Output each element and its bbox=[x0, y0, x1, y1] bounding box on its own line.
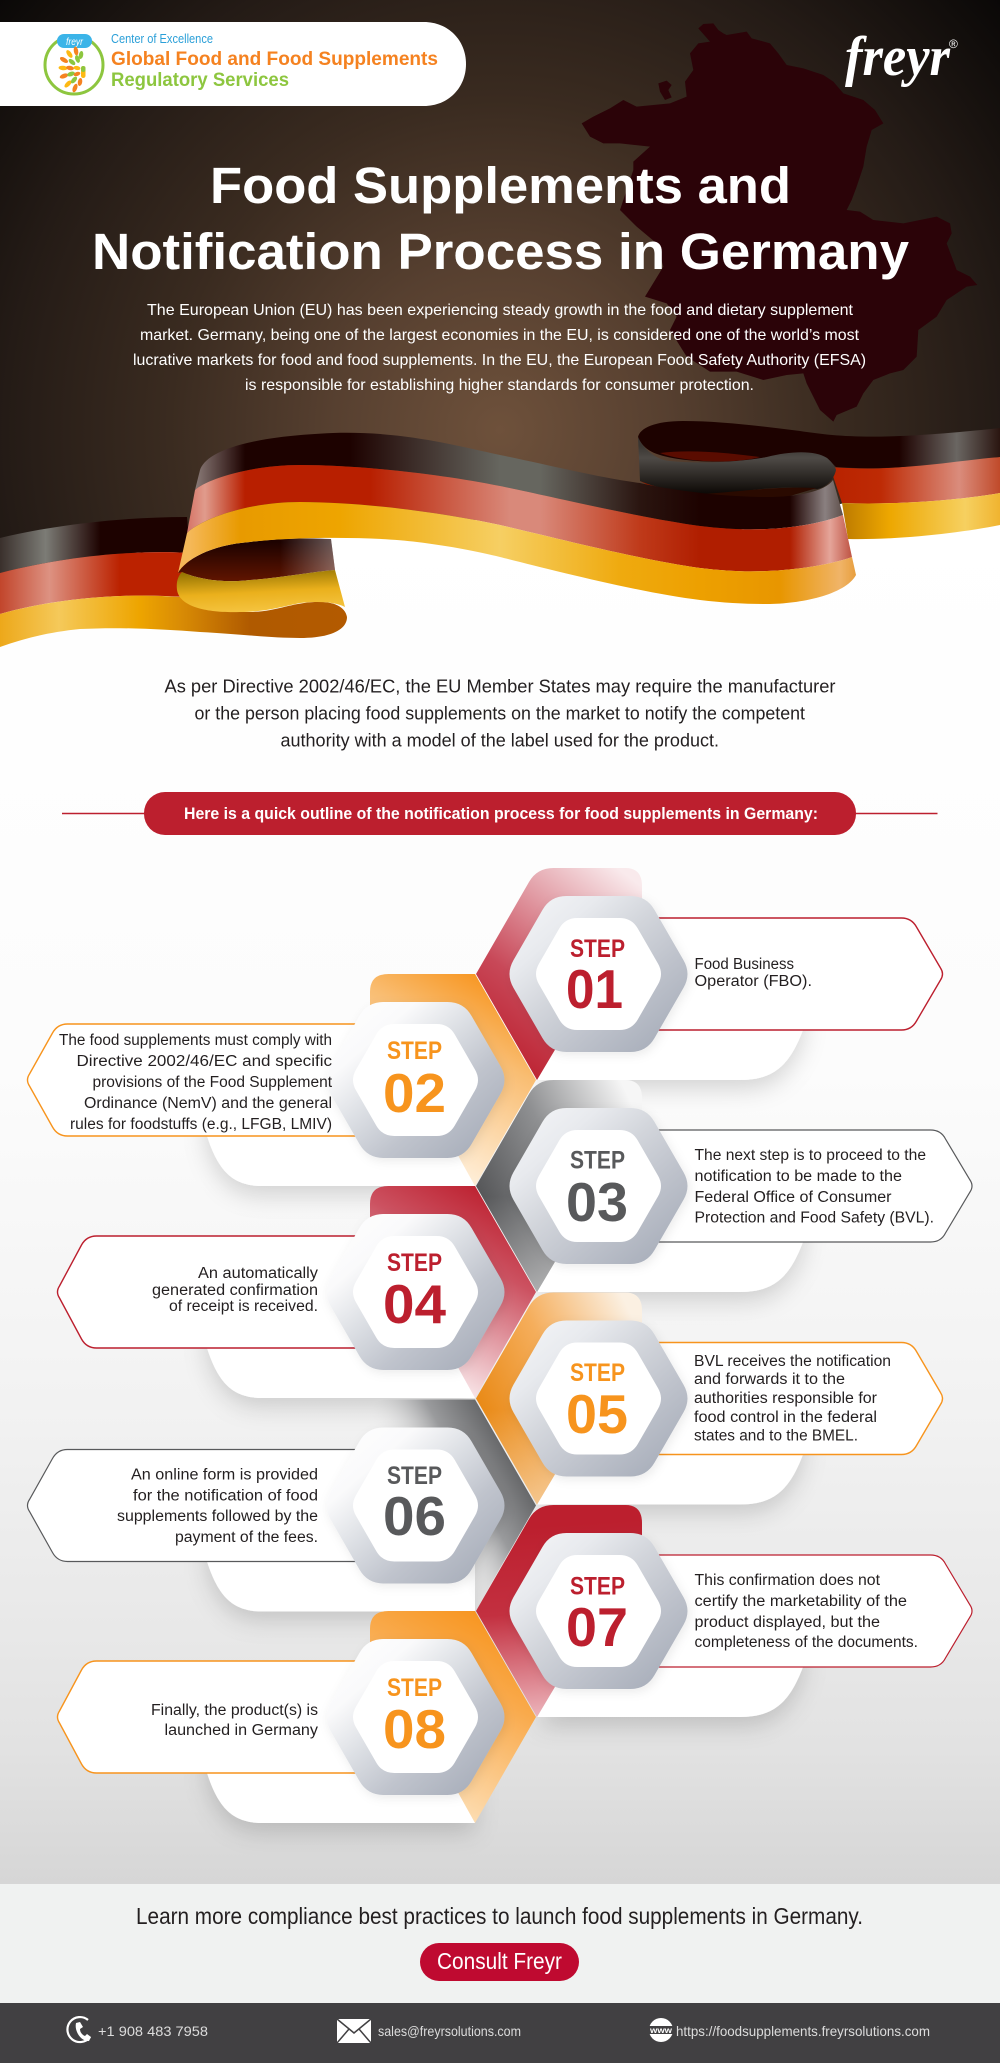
step 06 description: An online form is provided bbox=[131, 1466, 318, 1484]
step 08 description: Finally, the product(s) is bbox=[151, 1702, 318, 1719]
panel: footer contacts bbox=[0, 2003, 1000, 2063]
icon: freyr logo: freyr bbox=[845, 26, 951, 88]
step 03 description: Federal Office of Consumer bbox=[694, 1189, 892, 1206]
step 07 description: completeness of the documents. bbox=[694, 1634, 918, 1651]
text: call to action line: Learn more compliance best practices to launch food supplements in Germany. bbox=[136, 1903, 863, 1929]
step 02 number: 02 bbox=[383, 1062, 446, 1124]
text: introduction paragraph: market. Germany, being one of the largest economies in the EU, is considered one of the world’s most bbox=[140, 327, 860, 344]
step 04 description: of receipt is received. bbox=[169, 1298, 318, 1315]
step 02 label: STEP bbox=[387, 1037, 442, 1065]
step 07 description: certify the marketability of the bbox=[694, 1593, 907, 1610]
ribbon loop bbox=[638, 421, 1000, 502]
panel: step 07 bbox=[476, 1505, 972, 1717]
ribbon main band bbox=[178, 433, 856, 604]
icon: globe: www bbox=[649, 2026, 673, 2035]
step 04 number: 04 bbox=[383, 1273, 446, 1335]
panel: dark header background bbox=[0, 0, 1000, 600]
ribbon fold bbox=[177, 538, 345, 612]
step 02 description: provisions of the Food Supplement bbox=[92, 1074, 333, 1091]
panel: call to action bbox=[0, 1884, 1000, 2003]
step 04 description bbox=[152, 1265, 318, 1315]
heading banner: notification outline: Here is a quick outline of the notification process for food supplements in Germany: bbox=[184, 804, 818, 823]
heading banner: notification outline bbox=[62, 792, 938, 835]
step 01 label: STEP bbox=[570, 935, 625, 963]
step 07 label: STEP bbox=[570, 1572, 625, 1600]
text: center of excellence: Center of Excellence bbox=[111, 31, 213, 46]
icon: Germany map silhouette bbox=[582, 23, 977, 422]
step 08 number: 08 bbox=[383, 1698, 446, 1760]
text: phone number: +1 908 483 7958 bbox=[98, 2023, 208, 2039]
step 04 description: An automatically bbox=[198, 1265, 318, 1282]
step 03 description: Protection and Food Safety (BVL). bbox=[694, 1210, 934, 1226]
step 04 description: generated confirmation bbox=[152, 1282, 318, 1299]
icon: food supplements logo bbox=[45, 34, 103, 94]
step 08 label: STEP bbox=[387, 1674, 442, 1702]
step 01 description: Food Business bbox=[694, 956, 794, 973]
icon: freyr logo: ® bbox=[949, 37, 958, 51]
ribbon left tail bbox=[0, 517, 347, 647]
step 07 description: product displayed, but the bbox=[694, 1614, 880, 1631]
step 05 description: states and to the BMEL. bbox=[694, 1428, 858, 1444]
step 06 description: payment of the fees. bbox=[175, 1529, 318, 1546]
button: consult freyr: Consult Freyr bbox=[437, 1948, 562, 1974]
step 03 description: notification to be made to the bbox=[694, 1168, 902, 1185]
step 08 description bbox=[151, 1702, 318, 1739]
button: consult freyr bbox=[420, 1943, 579, 1981]
step 02 description: The food supplements must comply with bbox=[59, 1032, 332, 1049]
icon: food supplements logo: freyr bbox=[66, 37, 84, 48]
text: introduction paragraph: lucrative markets for food and food supplements. In the EU, the European Food Safety Authority (EFSA) bbox=[133, 352, 866, 369]
text: service name line 1: Global Food and Food Supplements bbox=[111, 49, 438, 70]
title: Food Supplements and bbox=[210, 157, 791, 214]
step 02 description: Ordinance (NemV) and the general bbox=[84, 1095, 332, 1112]
step 05 description: and forwards it to the bbox=[694, 1371, 845, 1388]
step 05 description: food control in the federal bbox=[694, 1409, 877, 1426]
page background bbox=[0, 520, 1000, 1885]
icon: globe bbox=[648, 2018, 674, 2042]
step 05 description bbox=[694, 1353, 891, 1444]
step 07 number: 07 bbox=[566, 1596, 628, 1658]
step 07 description bbox=[694, 1572, 918, 1651]
text: service name line 2: Regulatory Services bbox=[111, 70, 289, 91]
title bbox=[92, 157, 910, 280]
step 06 description: supplements followed by the bbox=[117, 1508, 318, 1525]
panel: step 04 bbox=[58, 1186, 536, 1398]
step 02 description bbox=[59, 1032, 333, 1133]
panel: step 05 bbox=[476, 1292, 942, 1504]
step 02 description: Directive 2002/46/EC and specific bbox=[76, 1053, 332, 1070]
text: email: sales@freyrsolutions.com bbox=[378, 2023, 521, 2039]
step 07 description: This confirmation does not bbox=[694, 1572, 881, 1589]
ribbon: German flag bbox=[0, 421, 1000, 647]
panel: step 03 bbox=[476, 1080, 972, 1292]
panel: logo pill bbox=[0, 22, 466, 106]
text: directive paragraph: authority with a model of the label used for the product. bbox=[280, 730, 719, 750]
step 01 number: 01 bbox=[566, 958, 623, 1020]
text: introduction paragraph bbox=[133, 302, 866, 394]
panel: step 06 bbox=[28, 1400, 536, 1612]
step 03 number: 03 bbox=[566, 1171, 628, 1233]
step 05 description: BVL receives the notification bbox=[694, 1353, 891, 1370]
panel: step 02 bbox=[28, 974, 536, 1186]
icon: envelope bbox=[337, 2019, 371, 2043]
text: directive paragraph bbox=[164, 676, 836, 750]
text: directive paragraph: As per Directive 2002/46/EC, the EU Member States may require the manufacturer bbox=[164, 676, 836, 696]
step 03 description bbox=[694, 1147, 934, 1226]
step 06 description bbox=[117, 1466, 318, 1546]
title: Notification Process in Germany bbox=[92, 223, 910, 280]
step 08 description: launched in Germany bbox=[164, 1722, 318, 1739]
step 03 label: STEP bbox=[570, 1146, 625, 1174]
icon: phone bbox=[67, 2017, 91, 2042]
step 02 description: rules for foodstuffs (e.g., LFGB, LMIV) bbox=[70, 1116, 332, 1133]
text: introduction paragraph: is responsible for establishing higher standards for consumer protection. bbox=[245, 377, 754, 394]
step 01 description: Operator (FBO). bbox=[694, 973, 812, 990]
text: introduction paragraph: The European Union (EU) has been experiencing steady growth in the food and dietary supplement bbox=[147, 302, 854, 319]
step 06 number: 06 bbox=[383, 1485, 446, 1547]
step 05 label: STEP bbox=[570, 1359, 625, 1387]
text: website: https://foodsupplements.freyrsolutions.com bbox=[676, 2023, 930, 2039]
step 05 description: authorities responsible for bbox=[694, 1390, 877, 1407]
step 04 label: STEP bbox=[387, 1249, 442, 1277]
text: directive paragraph: or the person placing food supplements on the market to notify the competent bbox=[194, 704, 805, 724]
ribbon right tail bbox=[830, 457, 1000, 539]
step 06 label: STEP bbox=[387, 1462, 442, 1490]
step 05 number: 05 bbox=[566, 1383, 628, 1445]
step 01 description bbox=[694, 956, 812, 990]
step 03 description: The next step is to proceed to the bbox=[694, 1147, 926, 1164]
panel: step 01 bbox=[476, 868, 942, 1080]
step 06 description: for the notification of food bbox=[133, 1488, 318, 1504]
panel: step 08 bbox=[58, 1611, 536, 1823]
